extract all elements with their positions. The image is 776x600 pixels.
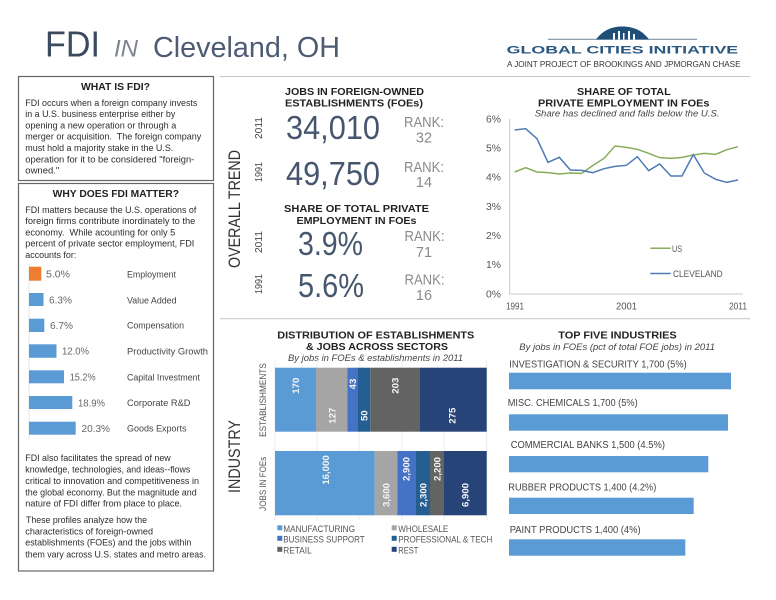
chart axes: 2011 xyxy=(729,302,747,312)
text block: profiles: characteristics of foreign-owned xyxy=(25,526,153,537)
text block: profiles xyxy=(25,514,206,559)
heading: jobs in FOEs: JOBS IN FOREIGN-OWNED xyxy=(285,87,424,98)
chart legend: CLEVELAND xyxy=(673,269,723,279)
bar: rubber products xyxy=(508,482,694,514)
heading: jobs in FOEs xyxy=(285,87,424,110)
text block: FDI definition: merger or acquisition. The foreign company xyxy=(25,131,202,142)
chart axes: 2% xyxy=(486,231,501,242)
title: Cleveland, OH xyxy=(153,32,340,64)
stacked bar: establishments xyxy=(258,363,487,437)
stacked bar legend: REST xyxy=(398,546,419,556)
stacked bar: establishments: 203 xyxy=(390,378,402,394)
bar chart: FDI share by measure: Employment xyxy=(127,268,176,279)
bar chart: FDI share by measure: Productivity Growth xyxy=(127,346,208,356)
bar chart: FDI share by measure xyxy=(29,264,208,440)
heading: distribution: By jobs in FOEs & establishments in 2011 xyxy=(288,353,463,364)
bar chart: FDI share by measure: 15.2% xyxy=(70,372,96,384)
heading: top five industries: By jobs in FOEs (pct of total FOE jobs) in 2011 xyxy=(519,342,715,353)
bar: investigation and security xyxy=(509,360,731,389)
stacked bar legend: PROFESSIONAL & TECH xyxy=(398,534,492,544)
line: Cleveland xyxy=(515,129,738,182)
text block: why FDI matters: economy. While acounting for only 5 xyxy=(25,226,175,237)
stacked bar legend: MANUFACTURING xyxy=(283,524,355,534)
chart axes: 1% xyxy=(486,260,501,271)
stat: 1991 jobs xyxy=(253,155,444,192)
bar: commercial banks: COMMERCIAL BANKS 1,500 (4.5%) xyxy=(511,440,665,451)
bar chart: FDI share by measure: Compensation xyxy=(127,320,184,331)
panel: what is FDI xyxy=(18,76,214,180)
chart axes: 5% xyxy=(486,144,501,154)
panel: why does FDI matter xyxy=(18,184,214,571)
stacked bar: jobs in FOEs: 2,900 xyxy=(402,457,412,481)
stat: 1991 share: RANK: xyxy=(404,272,444,288)
stat: 2011 share xyxy=(253,225,444,262)
panel: jobs in foreign-owned establishments xyxy=(253,87,444,192)
stat: 2011 share: RANK: xyxy=(404,229,444,245)
logo: Global Cities Initiative: GLOBAL CITIES INITIATIVE xyxy=(507,45,738,57)
stacked bar: establishments: 50 xyxy=(360,410,370,421)
bar chart: FDI share by measure: 5.0% xyxy=(46,270,70,280)
text block: spread of knowledge: nature of FDI differ from place to place. xyxy=(25,497,182,508)
text block: FDI definition: FDI occurs when a foreign company invests xyxy=(25,97,198,108)
panel: share of total private employment stats xyxy=(253,204,444,304)
bar chart: FDI share by measure: 20.3% xyxy=(82,424,110,435)
heading: distribution: & JOBS ACROSS SECTORS xyxy=(306,342,448,353)
chart axes: 4% xyxy=(486,172,501,184)
heading: line chart title: PRIVATE EMPLOYMENT IN FOEs xyxy=(538,99,710,110)
panel: top five industries xyxy=(508,331,731,556)
heading: top five industries xyxy=(519,331,715,353)
chart axes xyxy=(486,114,747,312)
text block: why FDI matters: percent of private sector employment, FDI xyxy=(25,238,194,249)
stat: 1991 share xyxy=(253,267,444,304)
title xyxy=(45,24,340,64)
text block: why FDI matters: foreign firms contribute inordinately to the xyxy=(25,215,195,226)
stat: 2011 jobs: 2011 xyxy=(253,117,265,139)
stacked bar: establishments: 127 xyxy=(328,408,338,424)
text block: spread of knowledge: critical to innovation and competitiveness in xyxy=(25,475,199,486)
stat: 2011 jobs: RANK: xyxy=(404,115,444,131)
heading: share of employment: EMPLOYMENT IN FOEs xyxy=(296,216,417,227)
chart axes: 3% xyxy=(486,202,501,213)
panel: distribution of establishments and jobs xyxy=(258,331,492,556)
heading: why does FDI matter: WHY DOES FDI MATTER? xyxy=(53,189,179,200)
text block: FDI definition: must hold a majority stake in the U.S. xyxy=(25,142,173,153)
stat: 2011 share: 71 xyxy=(416,245,432,261)
text block: why FDI matters: FDI matters because the U.S. operations of xyxy=(25,204,197,215)
stat: 2011 jobs xyxy=(253,109,444,146)
stacked bar: establishments: 275 xyxy=(448,407,458,424)
stat: 1991 jobs: 1991 xyxy=(253,162,265,182)
bar chart: FDI share by measure: Value Added xyxy=(127,294,176,305)
stat: 2011 jobs: 34,010 xyxy=(286,109,380,146)
chart legend xyxy=(650,244,723,279)
section label: overall trend: OVERALL TREND xyxy=(225,150,244,268)
text block: FDI definition: owned." xyxy=(25,165,59,176)
bar: misc chemicals xyxy=(508,398,728,431)
heading: line chart title: Share has declined and falls below the U.S. xyxy=(535,108,720,120)
heading: share of employment: SHARE OF TOTAL PRIVATE xyxy=(284,204,429,215)
stat: 1991 jobs: RANK: xyxy=(404,160,444,176)
text block: FDI definition: operation for it to be considered "foreign- xyxy=(25,153,194,164)
stacked bar legend xyxy=(277,524,492,556)
text block: FDI definition xyxy=(25,97,202,176)
bar chart: FDI share by measure: 6.7% xyxy=(50,321,73,332)
bar: investigation and security: INVESTIGATION & SECURITY 1,700 (5%) xyxy=(509,360,687,371)
text block: spread of knowledge: knowledge, technologies, and ideas--flows xyxy=(25,464,191,475)
stacked bar: jobs in FOEs xyxy=(258,451,487,515)
heading: distribution xyxy=(277,331,475,364)
stacked bar legend: WHOLESALE xyxy=(398,524,448,534)
bar: paint products: PAINT PRODUCTS 1,400 (4%) xyxy=(510,525,641,536)
stacked bar legend: RETAIL xyxy=(283,546,312,556)
stat: 2011 share: 3.9% xyxy=(298,225,363,262)
stat: 1991 share: 5.6% xyxy=(298,267,364,304)
heading: distribution: DISTRIBUTION OF ESTABLISHMENTS xyxy=(277,331,475,342)
stat: 1991 jobs: 14 xyxy=(416,175,432,191)
title: FDI xyxy=(45,24,100,64)
bar chart: FDI share by measure: 18.9% xyxy=(78,398,105,410)
heading: line chart title xyxy=(535,87,720,120)
chart axes: 0% xyxy=(486,290,501,300)
chart axes: 6% xyxy=(486,114,501,126)
bar: paint products xyxy=(509,525,685,556)
bar chart: FDI share by measure: Corporate R&D xyxy=(127,397,191,408)
bar chart: FDI share by measure: 12.0% xyxy=(62,347,89,358)
heading: share of employment xyxy=(284,204,429,227)
chart legend: US xyxy=(672,244,682,254)
stacked bar legend: BUSINESS SUPPORT xyxy=(283,534,365,544)
stat: 2011 jobs: 32 xyxy=(416,130,432,146)
stat: 2011 share: 2011 xyxy=(253,231,265,253)
title: IN xyxy=(114,36,139,62)
bar: misc chemicals: MISC. CHEMICALS 1,700 (5%) xyxy=(508,398,638,409)
logo: Global Cities Initiative xyxy=(507,26,741,69)
bar: commercial banks xyxy=(509,440,708,472)
text block: spread of knowledge xyxy=(25,452,199,508)
stacked bar: jobs in FOEs: 2,200 xyxy=(432,457,444,481)
bar: rubber products: RUBBER PRODUCTS 1,400 (4.2%) xyxy=(508,482,656,493)
bar chart: FDI share by measure: Capital Investment xyxy=(127,371,200,382)
stacked bar: jobs in FOEs: JOBS IN FOEs xyxy=(258,456,268,511)
stat: 1991 share: 1991 xyxy=(253,274,265,294)
panel: line chart share of private employment xyxy=(486,87,747,312)
text block: spread of knowledge: FDI also facilitates the spread of new xyxy=(25,452,171,463)
stacked bar: jobs in FOEs: 3,600 xyxy=(382,483,392,507)
text block: profiles: These profiles analyze how the xyxy=(26,514,147,525)
stat: 1991 jobs: 49,750 xyxy=(286,155,380,192)
text block: spread of knowledge: the global economy. But the magnitude and xyxy=(25,487,197,498)
bar chart: FDI share by measure: 6.3% xyxy=(49,296,72,306)
chart axes: 1991 xyxy=(506,302,524,312)
text block: why FDI matters xyxy=(25,204,197,260)
heading: top five industries: TOP FIVE INDUSTRIES xyxy=(558,331,677,342)
stat: 1991 share: 16 xyxy=(416,288,432,304)
section label: industry: INDUSTRY xyxy=(225,420,244,493)
text block: profiles: them vary across U.S. states and metro areas. xyxy=(25,548,206,559)
heading: jobs in FOEs: ESTABLISHMENTS (FOEs) xyxy=(285,99,423,110)
stacked bar: jobs in FOEs: 6,900 xyxy=(460,483,472,507)
stacked bar: establishments: 43 xyxy=(348,379,359,389)
stacked bar: jobs in FOEs: 16,000 xyxy=(321,455,332,485)
text block: why FDI matters: accounts for: xyxy=(25,249,76,260)
bar chart: FDI share by measure: Goods Exports xyxy=(127,422,187,434)
heading: what is FDI: WHAT IS FDI? xyxy=(81,82,150,93)
heading: line chart title: SHARE OF TOTAL xyxy=(577,87,671,98)
line: US xyxy=(515,146,738,174)
logo: Global Cities Initiative: A JOINT PROJECT OF BROOKINGS AND JPMORGAN CHASE xyxy=(507,59,741,69)
text block: profiles: establishments (FOEs) and the jobs within xyxy=(25,537,191,548)
text block: FDI definition: in a U.S. business enterprise either by xyxy=(25,108,176,119)
text block: FDI definition: opening a new operation or through a xyxy=(25,120,177,131)
stacked bar: establishments: ESTABLISHMENTS xyxy=(258,363,268,437)
stacked bar: establishments: 170 xyxy=(291,378,302,394)
stacked bar: jobs in FOEs: 2,300 xyxy=(418,483,430,507)
chart axes: 2001 xyxy=(616,302,637,312)
